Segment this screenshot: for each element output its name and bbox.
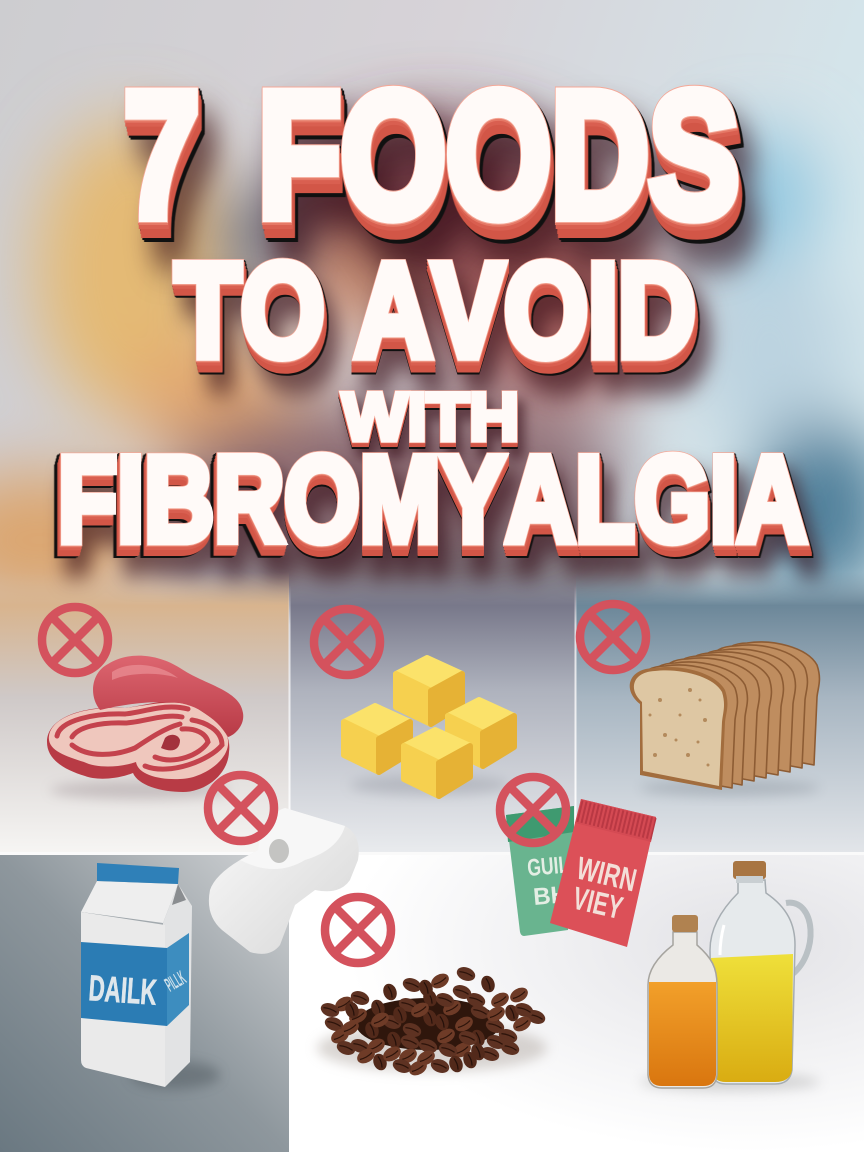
packet: red	[550, 799, 656, 947]
packet: red: VIEY	[569, 880, 626, 926]
panel: bottom left	[0, 855, 289, 1152]
title: W	[342, 379, 407, 455]
title: A	[737, 431, 807, 567]
title line 2	[170, 237, 724, 411]
food: red meat	[47, 656, 243, 799]
title: D	[618, 237, 696, 385]
packet: green: GUIL	[526, 851, 570, 882]
packet: red: WIRN	[573, 850, 640, 898]
food: butter cubes	[344, 658, 514, 796]
title: G	[635, 431, 710, 567]
title: Y	[441, 431, 505, 567]
title: O	[341, 55, 446, 254]
panel: bottom right	[289, 855, 864, 1152]
panel: top right	[576, 572, 864, 852]
title: FIBROMYALGIA	[58, 431, 807, 567]
title: I	[407, 379, 427, 455]
title: TO AVOID	[175, 237, 696, 385]
title: T	[427, 379, 469, 455]
title line 3	[338, 379, 532, 464]
packet: green: BH	[532, 881, 569, 911]
panel: top middle	[289, 572, 576, 852]
food: milk carton	[81, 863, 220, 1089]
title: S	[649, 55, 739, 254]
large olive oil jug	[710, 861, 811, 1084]
food: cooking oils	[640, 861, 820, 1091]
prohibition icon: sugar	[208, 775, 274, 841]
title: T	[175, 237, 241, 385]
food: sliced bread	[630, 642, 820, 796]
title: O	[241, 237, 325, 385]
title: F	[258, 55, 341, 254]
panel: top left	[0, 572, 289, 852]
food: milk carton: PILLK	[162, 967, 190, 996]
title line 1	[120, 55, 775, 292]
title: O	[446, 55, 551, 254]
prohibition icon: butter	[314, 609, 380, 675]
title: O	[284, 431, 360, 567]
title	[52, 55, 832, 592]
food: coffee beans	[317, 965, 547, 1078]
title: 7 FOODS	[124, 55, 739, 254]
food: packaged snacks	[506, 799, 656, 947]
title: V	[432, 237, 504, 385]
packet: green	[506, 806, 574, 936]
prohibition icon: bread	[580, 604, 646, 670]
title: I	[710, 431, 737, 567]
title line 4	[52, 431, 832, 592]
title: A	[505, 431, 575, 567]
title: 7	[124, 55, 199, 254]
background	[0, 0, 864, 620]
title: I	[588, 237, 618, 385]
prohibition icon: meat	[42, 607, 108, 673]
title: I	[117, 431, 144, 567]
title: F	[58, 431, 117, 567]
title: D	[551, 55, 649, 254]
title: WITH	[342, 379, 519, 455]
title: M	[360, 431, 441, 567]
food: milk carton: DAILK	[87, 967, 158, 1013]
title: L	[575, 431, 635, 567]
prohibition icon: packaged snacks	[500, 777, 566, 843]
title: O	[504, 237, 588, 385]
title: A	[355, 237, 432, 385]
small amber oil bottle	[648, 915, 717, 1088]
food: white sugar cube	[209, 808, 359, 954]
title: B	[144, 431, 214, 567]
title: H	[469, 379, 519, 455]
prohibition icon: coffee	[325, 897, 391, 963]
title: R	[214, 431, 284, 567]
